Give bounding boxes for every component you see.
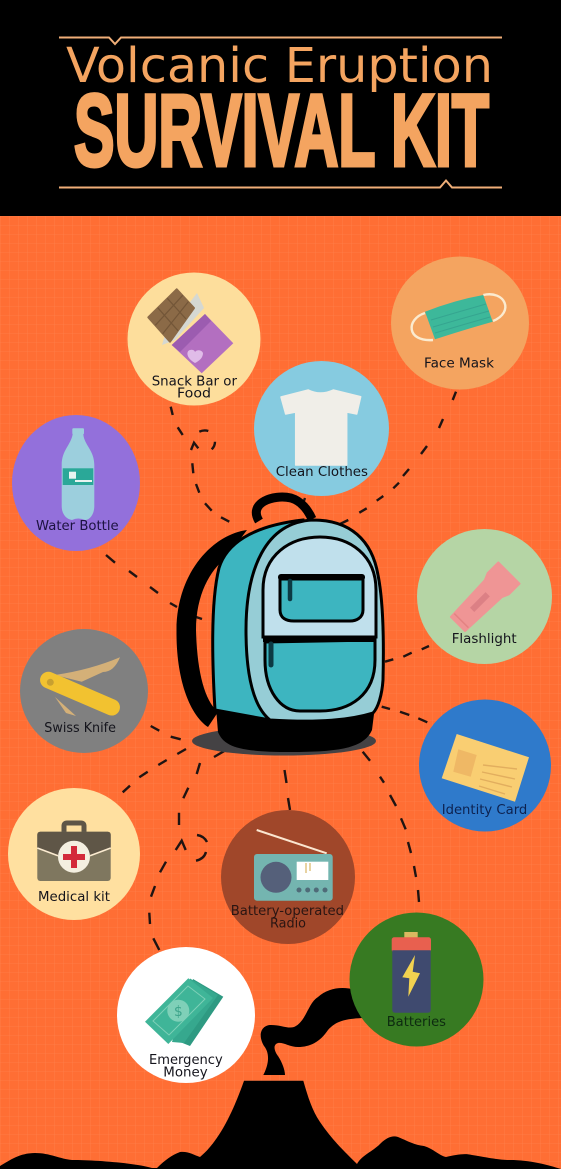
- base: [216, 706, 375, 752]
- label: [152, 374, 237, 402]
- zipper pull lower: [268, 644, 274, 665]
- volcano mountain and ridges: [0, 1081, 561, 1169]
- circle: [391, 256, 529, 390]
- small pocket: [280, 578, 363, 621]
- label: Batteries: [387, 1014, 446, 1030]
- dashed connector: snack bar: [171, 407, 229, 522]
- icon: radio: [254, 830, 333, 901]
- upper front panel: [263, 537, 376, 637]
- circle: [20, 629, 148, 753]
- item: batteries: [350, 912, 484, 1046]
- label: Food: [177, 386, 211, 402]
- label: Emergency: [149, 1052, 223, 1068]
- label: Swiss Knife: [44, 720, 116, 736]
- dashed connector: flashlight: [385, 646, 429, 662]
- item: identity card: [419, 700, 551, 832]
- item: snack bar or food: [128, 272, 260, 406]
- side panel: [213, 520, 320, 722]
- dashed connector: batteries: [363, 752, 419, 902]
- dashed connector: clean clothes: [302, 498, 305, 507]
- circle: [419, 700, 551, 832]
- top handle: [256, 497, 312, 521]
- label: [149, 1052, 223, 1081]
- item: emergency money: [117, 947, 255, 1083]
- label: [231, 903, 344, 932]
- label: Money: [163, 1065, 208, 1081]
- circle: [254, 361, 389, 496]
- icon: t-shirt: [281, 390, 361, 465]
- item: medical kit: [8, 788, 140, 920]
- circle: [117, 947, 255, 1083]
- dashed connector: emergency money: [149, 750, 226, 950]
- circle: [417, 529, 552, 664]
- lower pocket: [265, 640, 375, 711]
- item: battery-operated radio: [221, 810, 355, 944]
- dashed connector: face mask: [340, 392, 456, 524]
- icon: chocolate bar: [148, 289, 233, 373]
- title frame top line: [59, 38, 502, 44]
- dashed connector: water bottle: [106, 555, 202, 619]
- item: swiss knife: [20, 629, 148, 753]
- circle: [221, 810, 355, 944]
- icon: id card: [442, 734, 529, 802]
- icon: banknotes: $: [174, 1004, 183, 1020]
- smoke plume: [261, 988, 362, 1075]
- item: face mask: [391, 256, 529, 390]
- label: Clean Clothes: [276, 464, 368, 480]
- item: flashlight: [417, 529, 552, 664]
- title line 1: Volcanic Eruption: [66, 38, 493, 94]
- dashed connector: identity card: [382, 707, 427, 722]
- label: Battery-operated: [231, 903, 344, 919]
- item: water bottle: [12, 415, 140, 551]
- dashed connector: medical kit: [123, 749, 186, 792]
- icon: flashlight: [447, 562, 520, 635]
- icon: surgical mask: [412, 294, 505, 340]
- circle: [350, 912, 484, 1046]
- volcano silhouette: [0, 988, 561, 1169]
- icon: battery: [392, 932, 431, 1013]
- shoulder strap: [176, 530, 247, 727]
- small pocket zip bar: [278, 574, 365, 580]
- ground shadow: [192, 726, 376, 756]
- label: Radio: [270, 916, 306, 932]
- zipper pull upper: [288, 581, 292, 599]
- label: Snack Bar or: [152, 374, 237, 390]
- circle: [8, 788, 140, 920]
- circle: [12, 415, 140, 551]
- pocket divider: [263, 636, 376, 642]
- item: clean clothes: [254, 361, 389, 496]
- label: Face Mask: [424, 356, 494, 372]
- circle: [128, 272, 260, 406]
- icon: bottle: [62, 428, 94, 520]
- icon: first aid case: [37, 823, 111, 881]
- dashed connector: radio: [284, 770, 290, 810]
- label: Flashlight: [452, 631, 517, 647]
- label: Water Bottle: [36, 518, 119, 534]
- header band with title: [0, 0, 561, 216]
- front panel: [246, 520, 383, 721]
- backpack illustration: [176, 497, 383, 756]
- dashed connector: swiss knife: [151, 726, 181, 739]
- label: Medical kit: [38, 889, 110, 905]
- label: Identity Card: [442, 802, 527, 818]
- icon: swiss knife: [47, 657, 120, 716]
- title frame bottom line: [59, 180, 502, 188]
